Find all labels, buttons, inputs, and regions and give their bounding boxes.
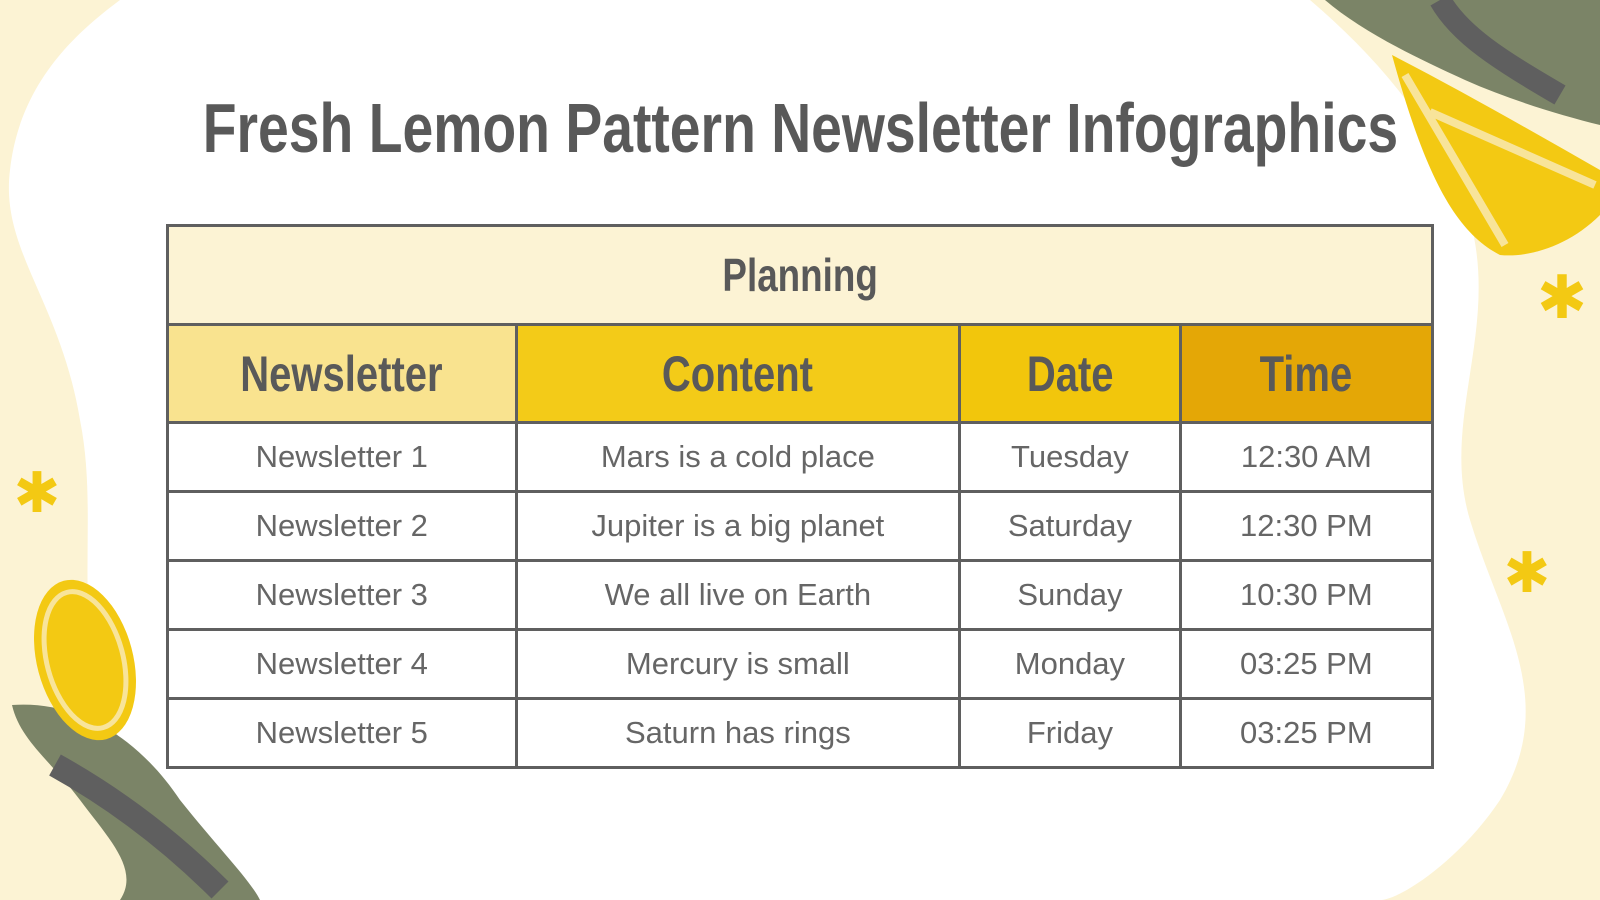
icon: flowers: ✱ — [14, 461, 60, 524]
icon: flowers: ✱ — [1504, 541, 1550, 604]
table: planning: Newsletter 3 — [256, 577, 428, 612]
table: planning: Saturday — [1008, 508, 1132, 543]
table: planning: 03:25 PM — [1240, 715, 1373, 750]
table: planning: Newsletter 5 — [256, 715, 428, 750]
table: planning: Newsletter 4 — [256, 646, 428, 681]
icon: flowers: ✱ — [1537, 264, 1587, 331]
table: planning: Date — [1027, 346, 1113, 402]
icon: bottom-left lemon — [17, 568, 153, 752]
table: planning: Jupiter is a big planet — [591, 508, 884, 543]
table: planning: Newsletter — [241, 346, 443, 402]
table: planning: Planning — [722, 249, 878, 301]
table: planning: Content — [662, 346, 813, 402]
table: planning — [166, 224, 1434, 769]
icon: bottom-left leaf — [12, 705, 260, 900]
title: Fresh Lemon Pattern Newsletter Infographics — [203, 89, 1398, 167]
table: planning: 12:30 PM — [1240, 508, 1373, 543]
table: planning: 10:30 PM — [1240, 577, 1373, 612]
table: planning: Mercury is small — [626, 646, 850, 681]
table: planning: 12:30 AM — [1241, 439, 1372, 474]
table: planning: Sunday — [1017, 577, 1122, 612]
table: planning: Saturn has rings — [625, 715, 851, 750]
icon: top-right leaf — [1325, 0, 1600, 125]
table: planning: Friday — [1027, 715, 1113, 750]
icon: top-right lemon slice — [1392, 55, 1600, 255]
table: planning: Tuesday — [1011, 439, 1129, 474]
table: planning: Mars is a cold place — [601, 439, 875, 474]
table: planning: We all live on Earth — [605, 577, 871, 612]
table: planning: 03:25 PM — [1240, 646, 1373, 681]
table: planning: Newsletter 2 — [256, 508, 428, 543]
table: planning: Monday — [1015, 646, 1125, 681]
table: planning: Newsletter 1 — [256, 439, 428, 474]
icon: flowers — [14, 264, 1587, 604]
table: planning: Time — [1260, 346, 1353, 402]
